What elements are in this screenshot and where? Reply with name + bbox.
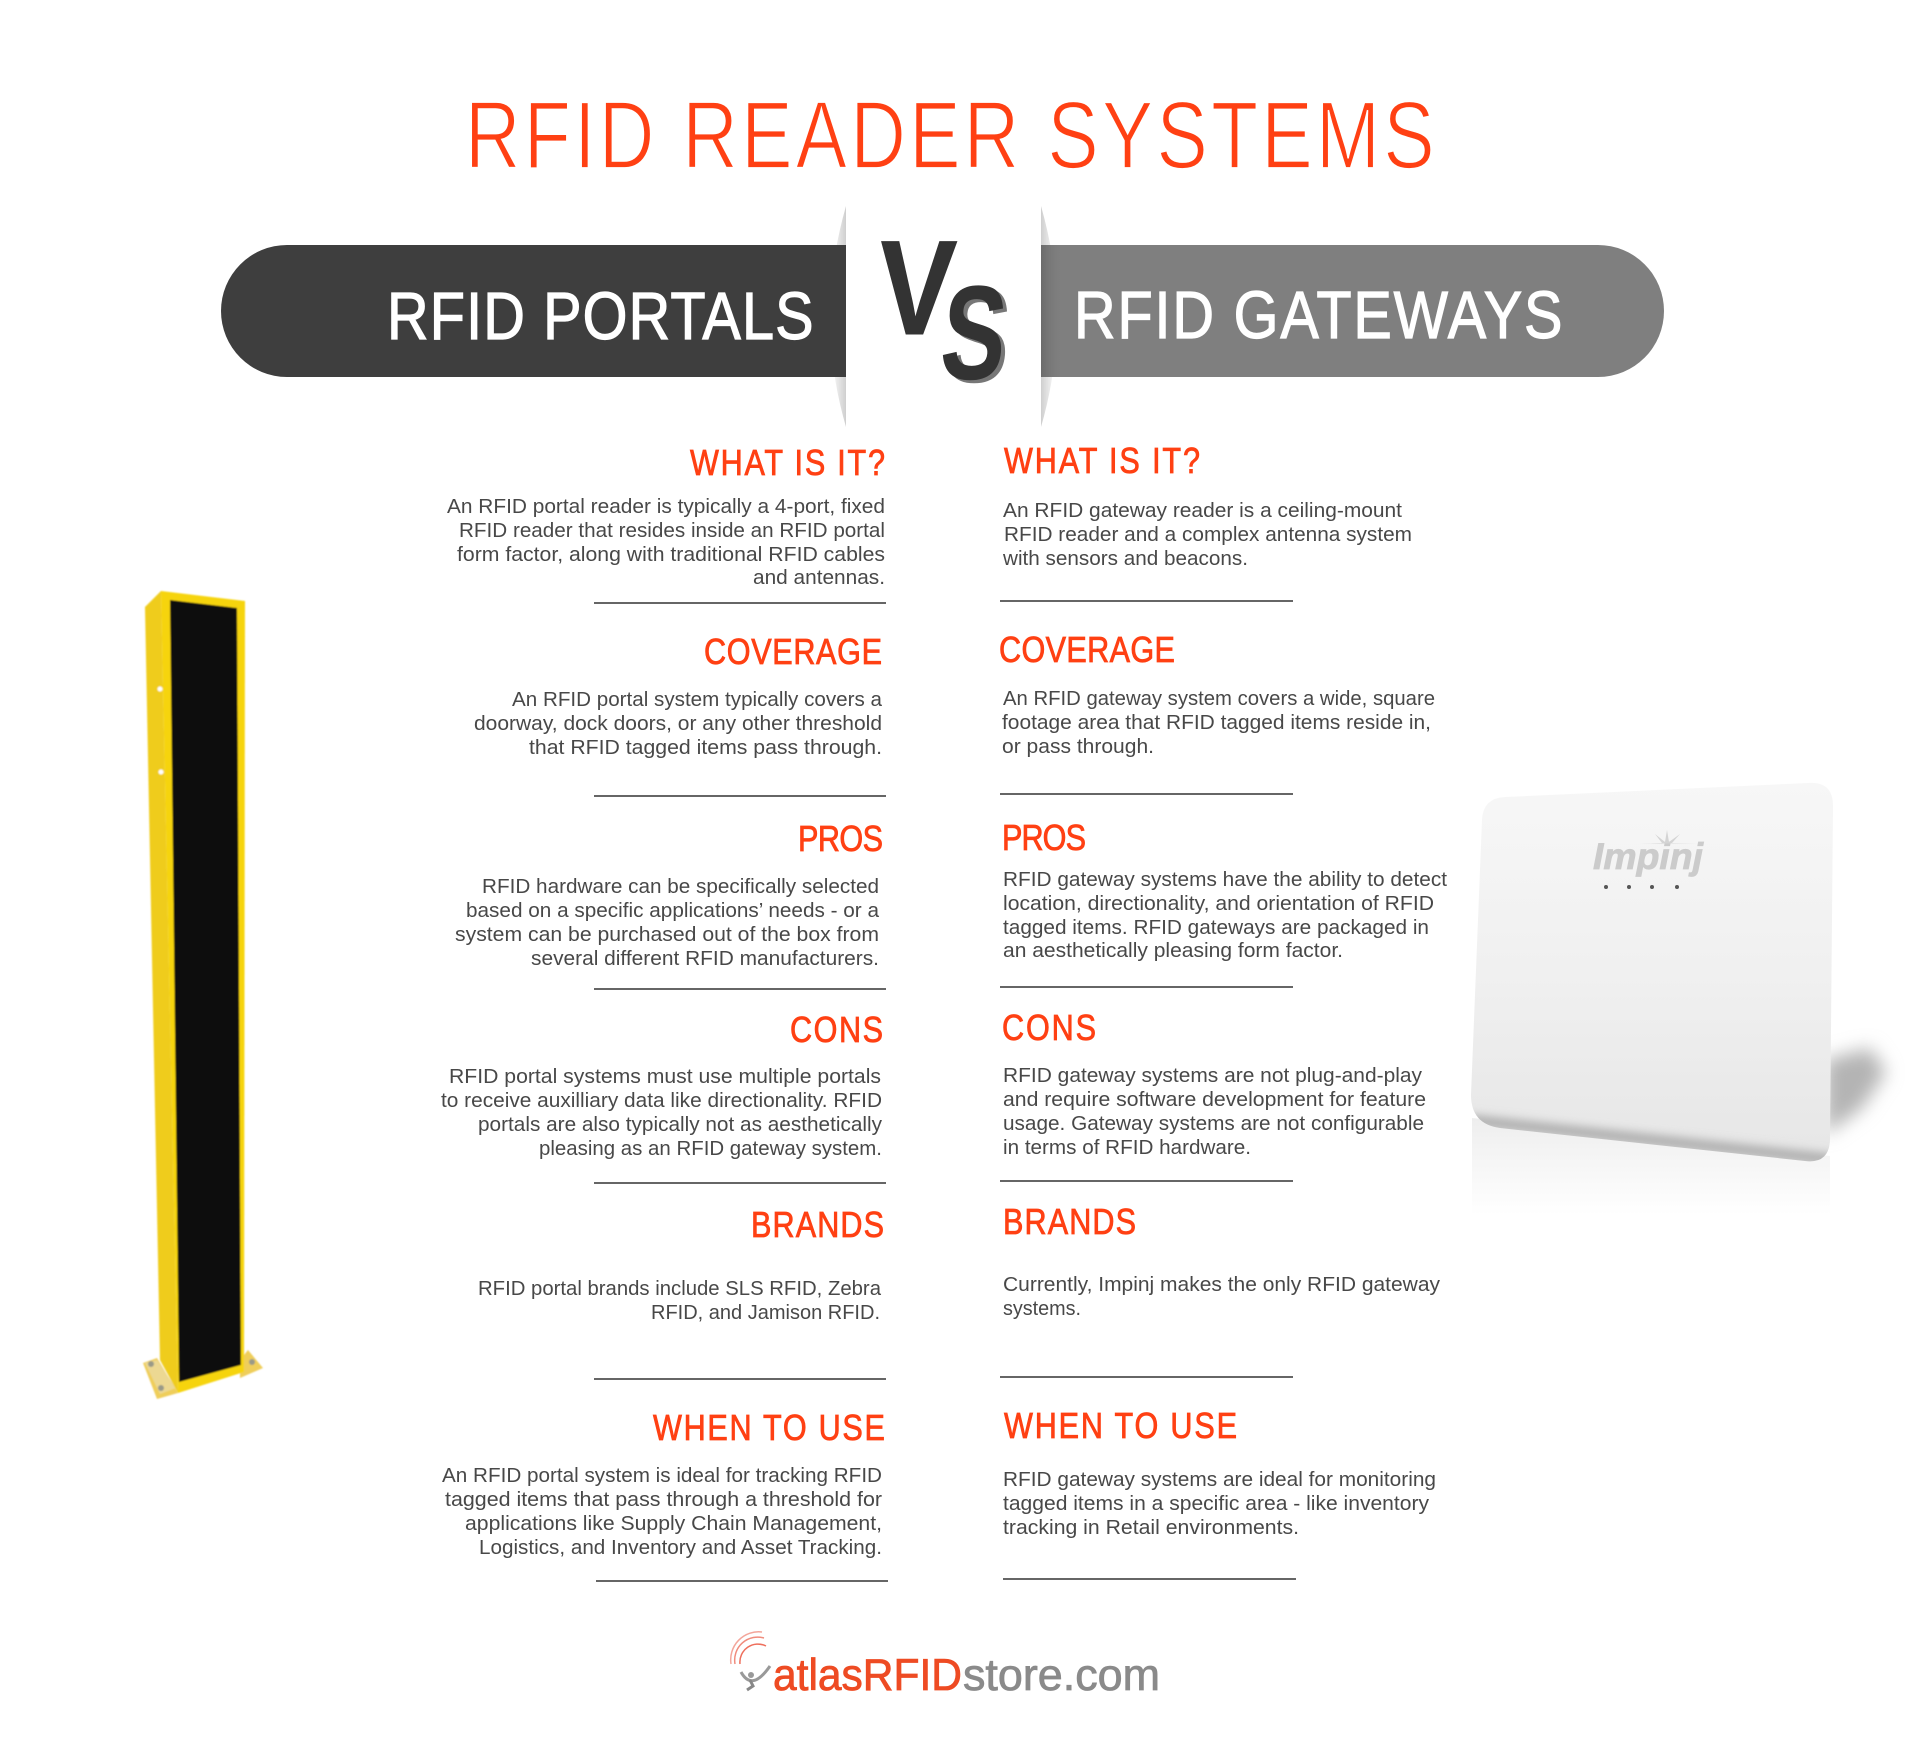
section: when to use xyxy=(1003,1407,1436,1539)
section: coverage: that RFID tagged items pass through. xyxy=(529,736,882,759)
section: cons: CONS xyxy=(790,1011,883,1051)
section: pros: PROS xyxy=(798,820,883,860)
section: coverage: COVERAGE xyxy=(999,631,1175,671)
section: brands: RFID, and Jamison RFID. xyxy=(651,1301,880,1324)
header band xyxy=(221,206,1664,427)
VS badge xyxy=(874,213,1017,411)
section: what is it: form factor, along with traditional RFID cables xyxy=(457,543,885,566)
section: when to use: WHEN TO USE xyxy=(1004,1407,1237,1447)
portals column xyxy=(441,444,888,1582)
section: pros: location, directionality, and orientation of RFID xyxy=(1003,892,1434,915)
section: when to use: RFID gateway systems are ideal for monitoring xyxy=(1003,1468,1436,1491)
section: brands xyxy=(1003,1203,1441,1320)
section: what is it xyxy=(447,444,885,589)
right bar: RFID Gateways xyxy=(1041,245,1664,377)
section: cons: pleasing as an RFID gateway system. xyxy=(539,1137,882,1160)
section: when to use: tagged items in a specific area - like inventory xyxy=(1003,1492,1430,1515)
section: when to use: Logistics, and Inventory and Asset Tracking. xyxy=(479,1536,882,1559)
section: what is it: An RFID gateway reader is a ceiling-mount xyxy=(1003,499,1402,522)
left bar: RFID Portals xyxy=(221,245,846,377)
section: pros: tagged items. RFID gateways are packaged in xyxy=(1003,916,1429,939)
section: cons: CONS xyxy=(1002,1009,1096,1049)
section: what is it: and antennas. xyxy=(753,566,885,589)
section: what is it: RFID reader and a complex antenna system xyxy=(1004,523,1412,546)
section: pros xyxy=(455,820,883,970)
section: what is it: with sensors and beacons. xyxy=(1002,547,1248,570)
section: coverage xyxy=(999,631,1435,758)
logo: atlasRFIDstore.com xyxy=(731,1632,1160,1700)
section: when to use xyxy=(442,1409,885,1559)
section: cons: portals are also typically not as aesthetically xyxy=(478,1113,883,1136)
gateways column xyxy=(999,442,1447,1580)
section: when to use: tagged items that pass through a threshold for xyxy=(445,1488,882,1511)
section: what is it: WHAT IS IT? xyxy=(690,444,885,484)
logo: atlasRFIDstore.com: store.com xyxy=(963,1651,1160,1700)
section: brands: BRANDS xyxy=(751,1206,884,1246)
section: pros: several different RFID manufacturers. xyxy=(531,947,879,970)
VS badge: V xyxy=(874,213,959,363)
section: brands: RFID portal brands include SLS RFID, Zebra xyxy=(478,1277,882,1300)
image: yellow RFID portal xyxy=(143,591,263,1399)
section: cons: RFID gateway systems are not plug-and-play xyxy=(1003,1064,1423,1087)
section: coverage: or pass through. xyxy=(1002,735,1154,758)
section: pros: RFID hardware can be specifically selected xyxy=(482,875,879,898)
section: when to use: applications like Supply Chain Management, xyxy=(465,1512,882,1535)
section: cons: usage. Gateway systems are not configurable xyxy=(1003,1112,1424,1135)
section: cons: in terms of RFID hardware. xyxy=(1003,1136,1251,1159)
section: brands: BRANDS xyxy=(1003,1203,1136,1243)
section: brands: Currently, Impinj makes the only RFID gateway xyxy=(1003,1273,1441,1296)
title: RFID READER SYSTEMS xyxy=(465,82,1435,189)
VS badge: S xyxy=(935,258,1013,408)
section: pros: system can be purchased out of the box from xyxy=(455,923,879,946)
section: coverage: doorway, dock doors, or any other threshold xyxy=(474,712,882,735)
section: cons xyxy=(441,1011,883,1160)
logo: atlasRFIDstore.com: atlasRFID xyxy=(773,1651,962,1700)
section: coverage: COVERAGE xyxy=(704,633,882,673)
section: cons: to receive auxilliary data like directionality. RFID xyxy=(441,1089,882,1112)
left bar: RFID Portals: RFID PORTALS xyxy=(387,279,814,354)
section: cons xyxy=(1002,1009,1426,1159)
section: pros: RFID gateway systems have the ability to detect xyxy=(1003,868,1447,891)
section: when to use: An RFID portal system is ideal for tracking RFID xyxy=(442,1464,882,1487)
VS badge: S xyxy=(939,261,1017,411)
section: coverage: An RFID gateway system covers a wide, square xyxy=(1003,687,1435,710)
section: pros: an aesthetically pleasing form factor. xyxy=(1003,939,1343,962)
section: coverage xyxy=(474,633,883,759)
right bar: RFID Gateways: RFID GATEWAYS xyxy=(1074,278,1562,353)
section: pros: PROS xyxy=(1002,819,1086,859)
section: when to use: tracking in Retail environments. xyxy=(1003,1516,1299,1539)
Impinj logo: Impinj xyxy=(1593,836,1704,877)
section: what is it: WHAT IS IT? xyxy=(1004,442,1200,482)
section: coverage: An RFID portal system typically covers a xyxy=(512,688,883,711)
section: brands: systems. xyxy=(1003,1297,1081,1320)
section: brands xyxy=(478,1206,884,1324)
section: what is it: An RFID portal reader is typically a 4-port, fixed xyxy=(447,495,885,518)
section: cons: and require software development for feature xyxy=(1003,1088,1426,1111)
section: what is it: RFID reader that resides inside an RFID portal xyxy=(459,519,885,542)
section: coverage: footage area that RFID tagged items reside in, xyxy=(1002,711,1431,734)
image: Impinj gateway antenna xyxy=(1471,784,1893,1168)
section: when to use: WHEN TO USE xyxy=(653,1409,885,1449)
section: pros xyxy=(1002,819,1447,962)
icon: atlas figure with radio waves xyxy=(731,1632,770,1690)
section: cons: RFID portal systems must use multiple portals xyxy=(449,1065,881,1088)
section: pros: based on a specific applications’ needs - or a xyxy=(466,899,880,922)
section: what is it xyxy=(1002,442,1412,570)
